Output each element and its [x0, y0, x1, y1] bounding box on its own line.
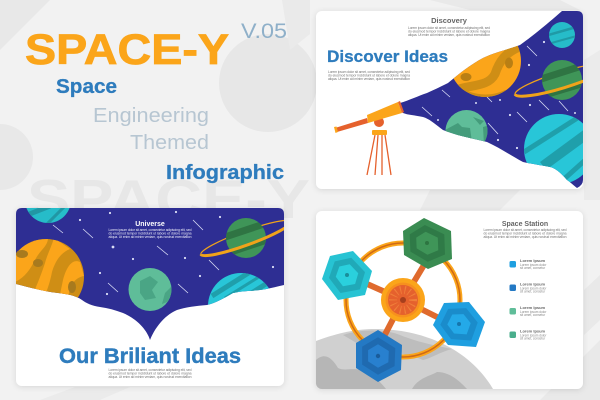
text block: universe intro: Lorem ipsum dolor sit amet, consectetur adipiscing elit, sed [108, 228, 192, 232]
text block: discover ideas: Lorem ipsum dolor sit amet, consectetur adipiscing elit, sed [328, 70, 410, 74]
legend item 4: Lorem Ipsum [520, 328, 546, 334]
text block: universe intro: aliqua. Ut enim ad minim veniam, quis nostrud exercitation [108, 235, 192, 239]
planet: blue [208, 273, 269, 305]
text block: universe intro: do eiusmod tempor incididunt ut labore et dolore magna [108, 232, 192, 236]
stars and meteors [422, 41, 576, 149]
text block: briliant ideas: aliqua. Ut enim ad minim veniam, quis nostrud exercitation [108, 375, 192, 379]
legend item 4: sit amet, consetur [520, 336, 546, 340]
planet: ringed green [514, 60, 583, 100]
text block: discovery intro: do eiusmod tempor incididunt ut labore et dolore magna [408, 30, 490, 34]
version label: V.05 [241, 20, 287, 43]
legend item 3: Lorem ipsum dolor [520, 310, 547, 314]
legend item 2: sit amet, consetur [520, 290, 546, 294]
hexagon: dark blue [356, 330, 402, 382]
text block: station intro: aliqua. Ut enim ad minim veniam, quis nostrud exercitation [484, 235, 567, 239]
legend item 1: sit amet, consetur [520, 266, 546, 270]
legend item 1: Lorem ipsum dolor [520, 263, 547, 267]
legend item 2: Lorem Ipsum [520, 282, 546, 286]
title: SPACE-Y [25, 26, 229, 74]
text block: station intro: do eiusmod tempor incididunt ut labore et dolore magna [484, 232, 567, 236]
subtitle: Space: Space [56, 76, 117, 98]
legend item 3 [510, 305, 547, 317]
hexagon: sky blue [433, 302, 485, 347]
panel: universe [14, 208, 286, 388]
text block: discovery intro [408, 26, 490, 37]
legend item 1 [510, 258, 547, 270]
planet: orange [16, 239, 84, 298]
subtitle: Themed: Themed [130, 132, 209, 154]
stars and meteors [53, 211, 274, 295]
subtitle: Engineering: Engineering [93, 105, 209, 127]
legend item 1: Lorem Ipsum [520, 258, 546, 263]
hexagon: green [403, 218, 452, 269]
legend item 3: Lorem Ipsum [520, 305, 546, 310]
text block: discovery intro: aliqua. Ut enim ad minim veniam, quis nostrud exercitation [408, 33, 490, 37]
hub [381, 278, 425, 322]
planet: small green [128, 268, 172, 311]
text block: briliant ideas: do eiusmod tempor incididunt ut labore et dolore magna [108, 372, 192, 376]
text block: station intro: Lorem ipsum dolor sit amet, consectetur adipiscing elit, sed [484, 228, 567, 232]
heading: our briliant ideas: Our Briliant Ideas [59, 345, 241, 368]
legend item 4 [510, 328, 547, 340]
planet: small green [446, 110, 488, 142]
heading: discover ideas: Discover Ideas [327, 47, 448, 66]
planet: orange [454, 46, 521, 97]
text block: discovery intro: Lorem ipsum dolor sit amet, consectetur adipiscing elit, sed [408, 26, 490, 30]
text block: briliant ideas [108, 368, 192, 379]
legend item 2: Lorem ipsum dolor [520, 286, 547, 290]
planet: teal top [26, 208, 70, 223]
heading: universe: Universe [135, 221, 165, 228]
panel: space station [316, 211, 583, 389]
planet: small teal [549, 22, 575, 48]
legend item 2 [510, 282, 547, 294]
heading: space station: Space Station [502, 221, 548, 228]
planet: ringed green [200, 218, 284, 258]
telescope beam with planets [400, 11, 583, 188]
ghost background wordmark: SPACE-Y [27, 168, 310, 230]
night sky with planets [16, 208, 284, 340]
text block: discover ideas: aliqua. Ut enim ad minim veniam, quis nostrud exercitation [328, 77, 410, 81]
text block: universe intro [108, 228, 192, 239]
panel: discovery [316, 11, 600, 189]
text block: discover ideas: do eiusmod tempor incididunt ut labore et dolore magna [328, 74, 410, 78]
wheel structure [346, 243, 460, 357]
text block: station intro [484, 228, 567, 239]
grey moon surface [316, 329, 493, 389]
subtitle: Infographic: Infographic [166, 162, 284, 184]
heading: discovery: Discovery [431, 16, 468, 25]
legend item 4: Lorem ipsum dolor [520, 334, 547, 338]
planet: large blue [524, 114, 583, 182]
text block: discover ideas [328, 70, 410, 81]
legend item 3: sit amet, consetur [520, 313, 546, 317]
hexagon: teal [322, 251, 372, 300]
telescope [334, 101, 404, 175]
text block: briliant ideas: Lorem ipsum dolor sit amet, consectetur adipiscing elit, sed [108, 368, 192, 372]
